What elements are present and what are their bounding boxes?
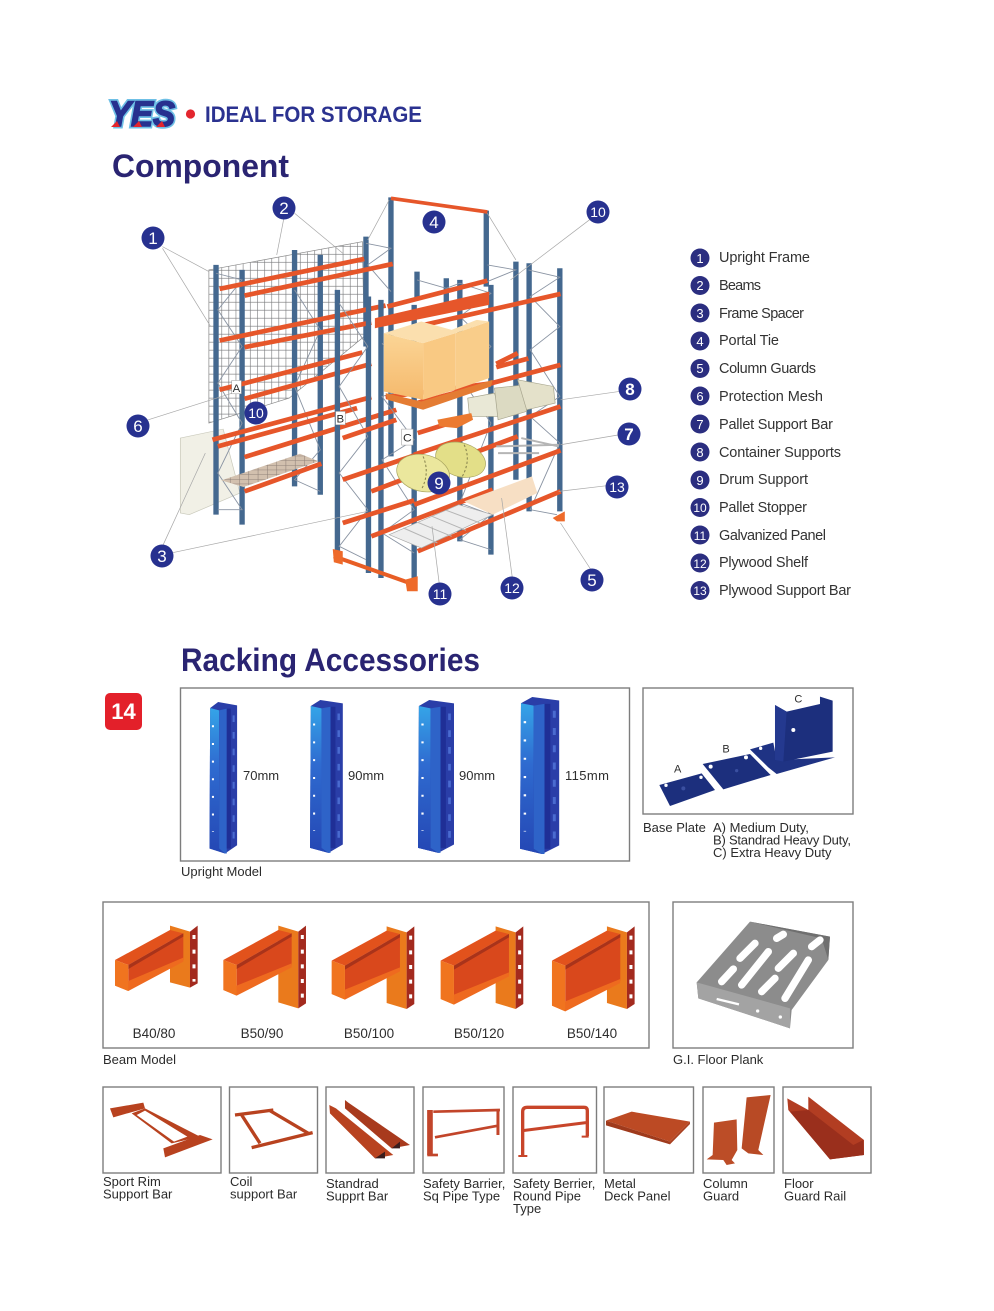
- legend: [690, 248, 851, 600]
- right bays beams: [343, 281, 561, 551]
- plate B: [703, 754, 771, 789]
- legend: Galvanized Panel: [719, 528, 826, 544]
- diagram number badges: 11: [433, 586, 447, 602]
- legend: Plywood Support Bar: [719, 583, 851, 599]
- caption: base plate: A) Medium Duty,: [713, 820, 809, 835]
- legend: 11: [694, 529, 707, 543]
- beam labels: B50/100: [344, 1026, 394, 1041]
- logo: YES: YES: [109, 95, 175, 134]
- logo: YES: YES: [109, 95, 175, 134]
- floor plank drawing: [697, 922, 830, 1028]
- bottom tie and guards: [333, 511, 565, 591]
- caption: sport rim support bar: [103, 1174, 173, 1202]
- legend: Protection Mesh: [719, 389, 823, 405]
- caption: safety barrier square pipe: Safety Barrier,: [423, 1176, 505, 1191]
- container baskets: [468, 380, 555, 420]
- red number badge 14: 14: [111, 699, 136, 724]
- label 70mm: 70mm: [243, 768, 279, 783]
- frame markers: C: [403, 432, 412, 444]
- panel: coil support bar: [230, 1087, 318, 1173]
- diagram number badges: 8: [625, 380, 635, 399]
- caption: base plate: B) Standrad Heavy Duty,: [713, 832, 851, 848]
- legend: Drum Support: [719, 472, 808, 488]
- plywood shelf: [464, 476, 537, 515]
- panel: base plate: A: [674, 764, 682, 776]
- caption: coil support bar: Coil: [230, 1174, 253, 1189]
- portal tie: [391, 198, 487, 212]
- caption: column guard: Guard: [703, 1188, 739, 1204]
- legend: 10: [693, 501, 707, 515]
- legend: Container Supports: [719, 445, 841, 461]
- frame markers: B: [336, 414, 344, 425]
- diagram number badges: 1: [148, 229, 158, 248]
- galvanized panel: [389, 505, 493, 548]
- caption: safety barrier square pipe: [423, 1176, 505, 1204]
- diagram number badges: 2: [279, 199, 289, 218]
- left rack: [212, 250, 396, 525]
- panel: base plate: C: [794, 694, 802, 706]
- panel: base plate: [643, 688, 853, 814]
- beam B50/120: [441, 926, 523, 1009]
- legend: 8: [696, 445, 704, 460]
- caption: safety barrier round pipe: Type: [513, 1201, 541, 1216]
- caption: upright model: Upright Model: [181, 864, 262, 879]
- panel: base plate: B: [722, 743, 730, 755]
- frame markers: [232, 380, 413, 445]
- plate A: [659, 773, 715, 806]
- legend: Pallet Support Bar: [719, 417, 833, 433]
- caption: standard support bar: Supprt Bar: [326, 1188, 389, 1204]
- label 90mm: 90mm: [348, 768, 384, 783]
- legend: 3: [696, 306, 704, 321]
- legend: 6: [696, 389, 704, 404]
- beam B40/80: [115, 926, 198, 991]
- braces: [339, 303, 414, 560]
- legend: 7: [696, 417, 704, 432]
- panel: column guard: [703, 1087, 774, 1173]
- upright 90mm: [310, 700, 343, 853]
- diagram number badges: 6: [133, 417, 143, 436]
- diagram number badges: [126, 196, 642, 606]
- caption: base plate: [643, 820, 851, 860]
- caption: floor guard rail: [784, 1176, 846, 1204]
- diagram number badges: 3: [157, 547, 167, 566]
- legend: Upright Frame: [719, 250, 810, 266]
- bullet dot: [186, 109, 195, 119]
- red number badge 14: [105, 693, 142, 730]
- label 90mm second: 90mm: [459, 768, 495, 783]
- legend: Column Guards: [719, 361, 816, 377]
- diagram number badges: 10: [248, 405, 264, 421]
- heading: Racking Accessories: Racking Accessories: [181, 642, 480, 678]
- caption: safety barrier round pipe: Round Pipe: [513, 1188, 581, 1204]
- legend: 12: [693, 557, 707, 571]
- label 115mm: 115mm: [565, 768, 609, 783]
- panel: sport rim support bar: [103, 1087, 221, 1173]
- diagram number badges: 9: [434, 474, 444, 493]
- diagram number badges: 13: [609, 479, 625, 495]
- caption: standard support bar: [326, 1176, 389, 1204]
- panel: floor plank: [673, 902, 853, 1048]
- legend: Pallet Stopper: [719, 500, 807, 516]
- beam B50/100: [332, 926, 414, 1009]
- heading: Component: Component: [112, 148, 289, 184]
- legend: 13: [693, 584, 707, 598]
- caption: metal deck panel: Metal: [604, 1176, 636, 1191]
- caption: coil support bar: support Bar: [230, 1186, 298, 1202]
- legend: 9: [696, 473, 704, 488]
- panel: safety barrier round pipe: [513, 1087, 596, 1173]
- cartons on pallet: [384, 320, 493, 410]
- legend: Beams: [719, 278, 761, 294]
- caption: sport rim support bar: Sport Rim: [103, 1174, 161, 1189]
- upright 70mm: [210, 702, 237, 854]
- pallet support bars: [496, 438, 559, 453]
- caption: base plate: Base Plate: [643, 820, 706, 835]
- caption: column guard: [703, 1176, 748, 1204]
- panel: beam model: [103, 902, 649, 1048]
- caption: floor guard rail: Floor: [784, 1176, 814, 1191]
- legend: 2: [696, 278, 704, 293]
- legend: 4: [696, 334, 704, 349]
- diagram number badges: 7: [624, 425, 634, 444]
- beam labels: B50/90: [241, 1026, 283, 1041]
- upright 90mm second: [418, 700, 454, 853]
- middle uprights: [337, 290, 414, 581]
- plate C: [750, 697, 835, 774]
- caption: floor plank: G.I. Floor Plank: [673, 1052, 764, 1067]
- beam B50/140: [552, 926, 635, 1011]
- caption: sport rim support bar: Support Bar: [103, 1186, 173, 1202]
- rack illustration: [148, 197, 619, 591]
- caption: standard support bar: Standrad: [326, 1176, 379, 1191]
- beam B50/90: [223, 926, 306, 1008]
- legend: Portal Tie: [719, 333, 779, 349]
- diagram number badges: 4: [429, 213, 439, 232]
- upright 115mm: [520, 697, 559, 854]
- protection mesh: [209, 242, 364, 423]
- caption: safety barrier round pipe: [513, 1176, 595, 1216]
- legend: 5: [696, 361, 704, 376]
- beam labels: B50/140: [567, 1026, 617, 1041]
- caption: safety barrier square pipe: Sq Pipe Type: [423, 1188, 500, 1204]
- panel: floor guard rail: [783, 1087, 871, 1173]
- panel: metal deck panel: [604, 1087, 694, 1173]
- panel: upright model: [180, 688, 630, 861]
- panel: standard support bar: [326, 1087, 414, 1173]
- diagram number badges: 10: [590, 204, 606, 220]
- caption: metal deck panel: [604, 1176, 671, 1204]
- caption: floor guard rail: Guard Rail: [784, 1188, 846, 1204]
- caption: column guard: Column: [703, 1176, 748, 1191]
- caption: coil support bar: [230, 1174, 298, 1202]
- caption: base plate: C) Extra Heavy Duty: [713, 845, 832, 860]
- diagram number badges: 12: [504, 580, 520, 596]
- caption: metal deck panel: Deck Panel: [604, 1188, 671, 1204]
- beam labels: [133, 1026, 617, 1041]
- legend: Frame Spacer: [719, 306, 804, 322]
- panel: safety barrier square pipe: [423, 1087, 504, 1173]
- wall board: [180, 429, 240, 515]
- leader lines: [148, 200, 619, 583]
- legend: Plywood Shelf: [719, 555, 809, 571]
- beam labels: B40/80: [133, 1026, 175, 1041]
- frame markers: A: [233, 383, 241, 395]
- caption: safety barrier round pipe: Safety Berrier,: [513, 1176, 595, 1191]
- diagram number badges: 5: [587, 571, 597, 590]
- back frame uprights: [366, 197, 560, 555]
- tagline: IDEAL FOR STORAGE: [205, 102, 422, 127]
- beam labels: B50/120: [454, 1026, 504, 1041]
- legend: 1: [696, 251, 704, 266]
- caption: beam model: Beam Model: [103, 1052, 176, 1067]
- drums: [392, 436, 491, 497]
- drum support bar: [437, 413, 473, 428]
